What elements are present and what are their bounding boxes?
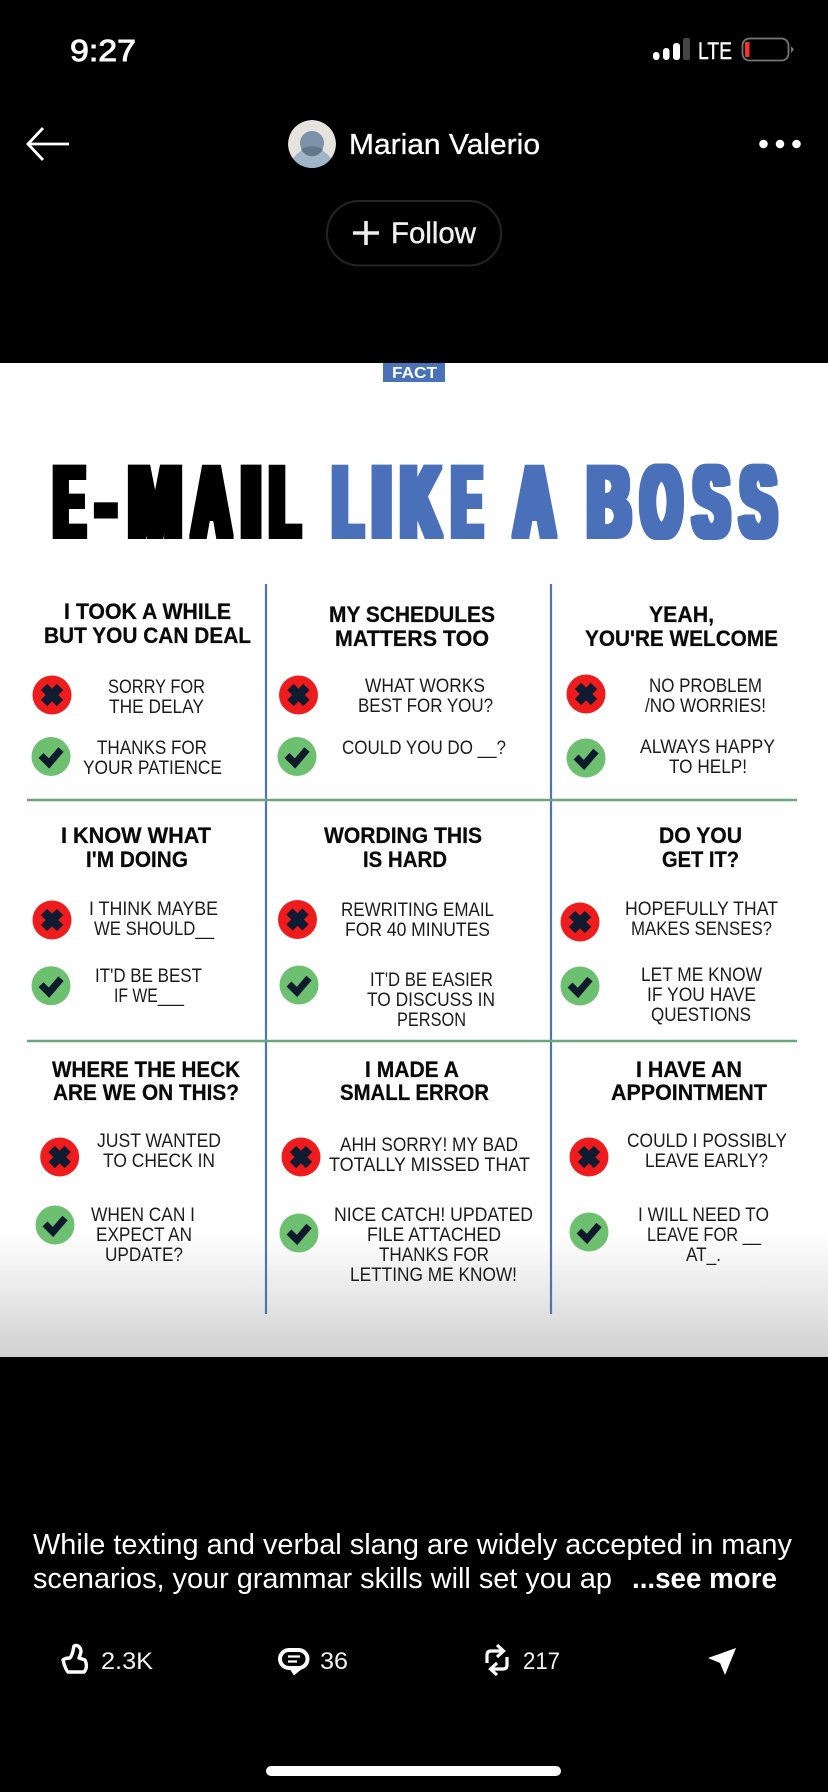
title: L [334, 445, 362, 559]
title: M [129, 445, 181, 559]
avatar [288, 120, 336, 168]
right phrase: LET ME KNOW [641, 965, 762, 986]
heading [324, 823, 482, 872]
infographic [0, 363, 828, 1357]
wrong phrase: REWRITING EMAIL [341, 900, 494, 921]
wrong phrase [341, 900, 494, 941]
wrong phrase: LEAVE EARLY? [645, 1151, 768, 1172]
heading [611, 1057, 768, 1105]
heading: SMALL ERROR [340, 1080, 489, 1105]
right phrase: IT'D BE BEST [95, 966, 202, 987]
icon: comment [280, 1650, 308, 1676]
right phrase [367, 970, 495, 1031]
wrong phrase [108, 677, 205, 718]
wrong phrase [645, 676, 766, 717]
title: E [55, 445, 84, 559]
heading: DO YOU [659, 823, 742, 848]
icon: wrong [32, 676, 72, 714]
heading: IS HARD [363, 847, 447, 872]
panel: wording this is hard [278, 823, 495, 1031]
heading: WHERE THE HECK [52, 1057, 240, 1082]
heading [44, 599, 251, 648]
icon: wrong [560, 902, 600, 942]
panel: I know what I'm doing [32, 823, 218, 1007]
caption: While texting and verbal slang are widely accepted in many [33, 1529, 793, 1561]
icon: wrong [282, 1138, 320, 1176]
right phrase: I WILL NEED TO [638, 1205, 769, 1226]
heading: APPOINTMENT [611, 1080, 768, 1105]
right phrase: LETTING ME KNOW! [350, 1265, 517, 1286]
wrong phrase: WHAT WORKS [365, 676, 485, 697]
heading: YEAH, [649, 602, 714, 627]
title: O [642, 445, 681, 559]
infographic background [0, 363, 828, 1357]
clock: 9:27 [70, 33, 136, 68]
panel: yeah, you're welcome [566, 602, 778, 778]
right phrase: FILE ATTACHED [367, 1225, 501, 1246]
comments count: 36 [320, 1648, 348, 1675]
right phrase [640, 737, 775, 778]
right phrase: UPDATE? [105, 1245, 183, 1266]
title: L [271, 445, 299, 559]
icon: right [278, 737, 316, 776]
icon: right [32, 966, 70, 1005]
right phrase: THANKS FOR [379, 1245, 489, 1266]
heading [340, 1057, 489, 1105]
title: - [97, 445, 115, 559]
panel: my schedules [278, 602, 506, 776]
right phrase: COULD YOU DO __? [342, 738, 506, 759]
follow button [327, 201, 501, 266]
heading: I TOOK A WHILE [64, 599, 231, 624]
heading: MATTERS TOO [335, 626, 489, 651]
icon: right [32, 737, 70, 776]
right phrase: WHEN CAN I [91, 1205, 195, 1226]
wrong phrase: WE SHOULD__ [94, 919, 214, 940]
panel: do you get it [560, 823, 778, 1026]
right phrase: TO HELP! [669, 757, 747, 778]
heading: I MADE A [365, 1057, 459, 1082]
icon: back arrow [28, 128, 69, 160]
caption [33, 1529, 793, 1595]
wrong phrase: JUST WANTED [97, 1131, 221, 1152]
heading [52, 1057, 240, 1105]
wrong phrase: I THINK MAYBE [89, 899, 218, 920]
heading: MY SCHEDULES [329, 602, 495, 627]
icon: wrong [279, 676, 318, 714]
wrong phrase: NO PROBLEM [649, 676, 762, 697]
icon: right [566, 738, 606, 778]
fact tag [383, 363, 445, 382]
title: S [694, 445, 729, 559]
right phrase: PERSON [397, 1010, 466, 1031]
title: S [741, 445, 776, 559]
wrong phrase: THE DELAY [109, 697, 204, 718]
engagement bar [63, 1645, 736, 1676]
wrong phrase [89, 899, 218, 940]
wrong phrase: AHH SORRY! MY BAD [340, 1135, 518, 1156]
title [55, 445, 776, 559]
heading: I KNOW WHAT [61, 823, 212, 848]
icon: wrong [32, 900, 72, 940]
title: A [193, 445, 230, 559]
icon: repost [487, 1645, 507, 1675]
right phrase [641, 965, 762, 1026]
title: A [515, 445, 553, 559]
wrong phrase [358, 676, 493, 717]
status bar [70, 33, 794, 68]
wrong phrase: TO CHECK IN [103, 1151, 215, 1172]
right phrase [95, 966, 202, 1007]
title: I [372, 445, 392, 559]
wrong phrase: SORRY FOR [108, 677, 205, 698]
right phrase: QUESTIONS [651, 1005, 751, 1026]
right phrase: YOUR PATIENCE [83, 758, 222, 779]
right phrase: THANKS FOR [97, 738, 207, 759]
wrong phrase: COULD I POSSIBLY [627, 1131, 787, 1152]
right phrase [83, 738, 222, 779]
right phrase: EXPECT AN [96, 1225, 192, 1246]
wrong phrase: TOTALLY MISSED THAT [329, 1155, 530, 1176]
panel: I made a small error [280, 1057, 533, 1286]
icon: right [36, 1206, 74, 1244]
icon: battery [742, 38, 794, 60]
title: E [453, 445, 481, 559]
icon: right [280, 966, 318, 1004]
wrong phrase [329, 1135, 530, 1176]
caption: ...see more [632, 1563, 777, 1595]
wrong phrase: BEST FOR YOU? [358, 696, 493, 717]
icon: right [570, 1212, 608, 1252]
right phrase [638, 1205, 769, 1266]
heading [585, 602, 778, 651]
profile header [28, 120, 801, 266]
caption: scenarios, your grammar skills will set you ap [33, 1563, 612, 1595]
title: K [401, 445, 439, 559]
heading: I HAVE AN [636, 1057, 742, 1082]
grid lines [266, 584, 551, 1314]
right phrase: IT'D BE EASIER [370, 970, 493, 991]
wrong phrase [627, 1131, 787, 1172]
icon: send [708, 1648, 736, 1675]
right phrase: TO DISCUSS IN [367, 990, 495, 1011]
icon: like [63, 1645, 86, 1672]
panel: I have an appointment [570, 1057, 787, 1266]
home indicator [266, 1766, 561, 1776]
likes count: 2.3K [101, 1648, 153, 1675]
right phrase: LEAVE FOR __ [647, 1225, 761, 1246]
icon: wrong [40, 1138, 79, 1176]
panel: where the heck [36, 1057, 240, 1266]
wrong phrase: HOPEFULLY THAT [625, 899, 778, 920]
icon: wrong [566, 674, 606, 714]
reposts count: 217 [523, 1648, 560, 1675]
right phrase [91, 1205, 195, 1266]
right phrase: IF YOU HAVE [647, 985, 756, 1006]
icon: right [560, 966, 600, 1006]
heading: BUT YOU CAN DEAL [44, 623, 251, 648]
wrong phrase: MAKES SENSES? [631, 919, 772, 940]
right phrase: NICE CATCH! UPDATED [334, 1205, 533, 1226]
heading [659, 823, 742, 872]
heading: YOU'RE WELCOME [585, 626, 778, 651]
wrong phrase [625, 899, 778, 940]
wrong phrase: /NO WORRIES! [645, 696, 766, 717]
title: B [588, 445, 630, 559]
panel: I took a while [32, 599, 251, 779]
heading: ARE WE ON THIS? [53, 1080, 239, 1105]
network label: LTE [698, 38, 732, 65]
icon: wrong [278, 900, 317, 939]
right phrase: IF WE___ [114, 986, 184, 1007]
wrong phrase [97, 1131, 221, 1172]
title: I [241, 445, 262, 559]
icon: wrong [570, 1138, 608, 1176]
icon: right [280, 1214, 318, 1252]
icon: signal bars [653, 38, 690, 60]
fact tag: FACT [392, 365, 437, 382]
heading: WORDING THIS [324, 823, 482, 848]
heading [61, 823, 212, 872]
right phrase: ALWAYS HAPPY [640, 737, 775, 758]
wrong phrase: FOR 40 MINUTES [345, 920, 490, 941]
icon: more dots [759, 140, 801, 148]
heading: I'M DOING [86, 847, 188, 872]
follow button: Follow [391, 217, 476, 250]
right phrase: AT_. [686, 1245, 721, 1266]
heading [329, 602, 495, 651]
author name: Marian Valerio [349, 129, 540, 161]
heading: GET IT? [662, 847, 739, 872]
right phrase [334, 1205, 533, 1286]
